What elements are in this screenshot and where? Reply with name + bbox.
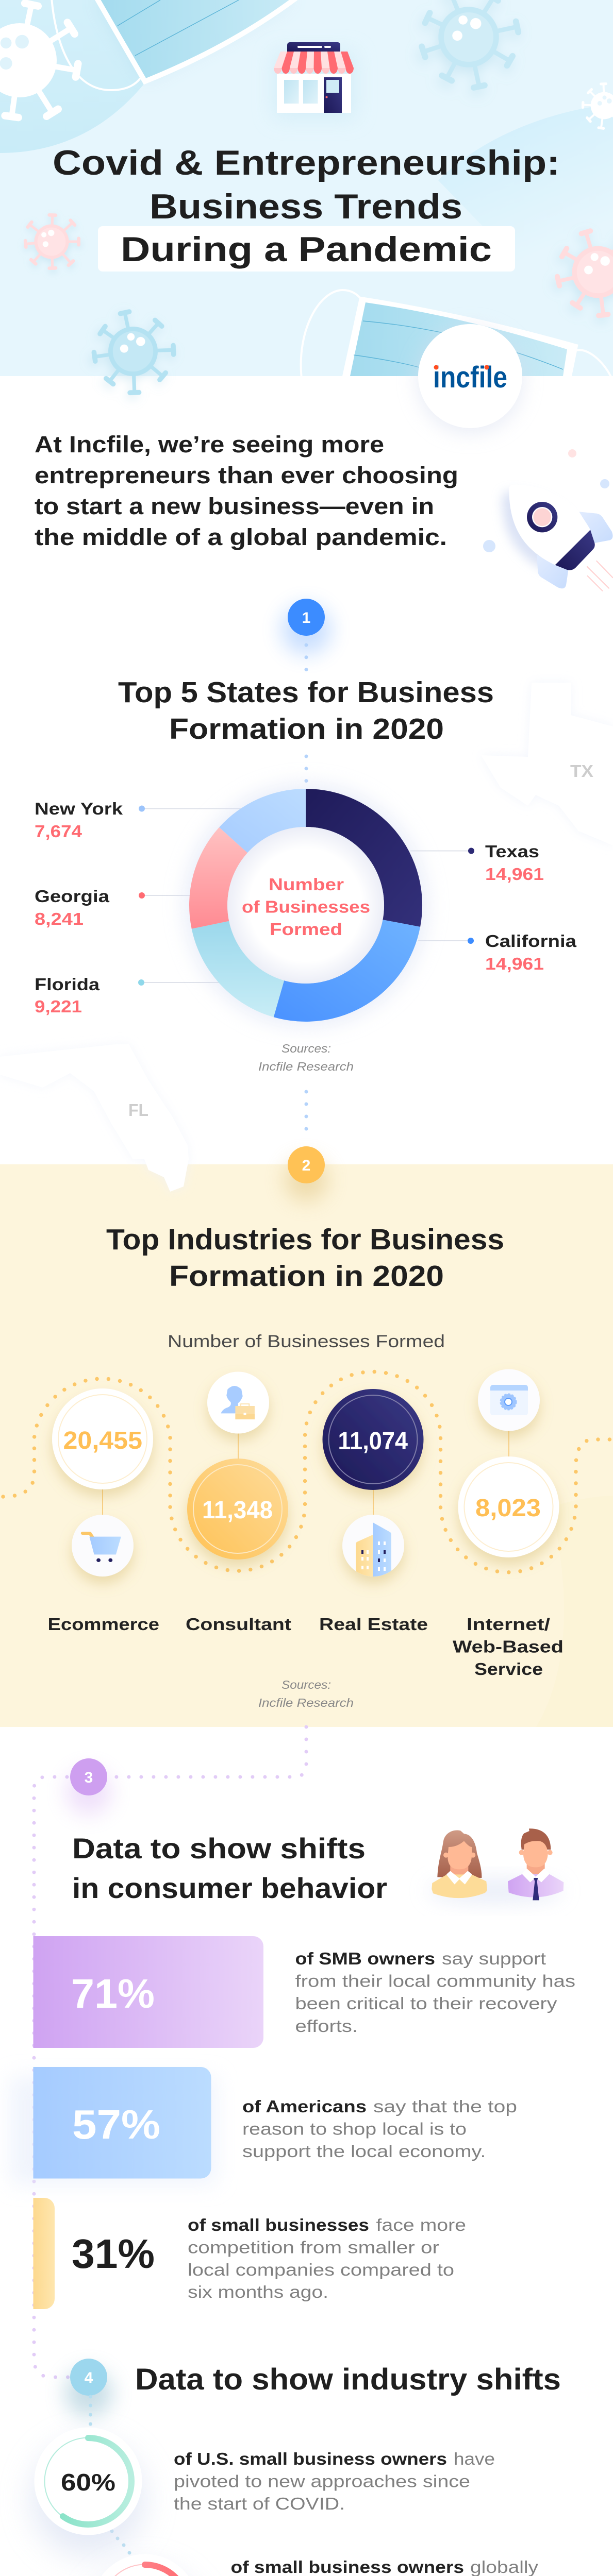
text: small businesses: six months ago. [188,2282,328,2301]
legend: New York: New York [35,799,123,818]
text: Americans: of Americans [242,2097,367,2116]
text: small businesses: face more [376,2215,466,2234]
legend: Georgia: 8,241 [35,909,84,928]
legend: Georgia: Georgia [35,887,110,906]
industry labels: Real Estate [319,1615,428,1634]
title highlight box [98,226,515,272]
sources [258,1678,354,1709]
text: SMB owners [295,1949,575,2036]
legend: California [468,931,577,973]
step badge 3: 3 [85,1769,93,1786]
text: small businesses: of small businesses [188,2215,369,2234]
dotted connector [304,1092,308,1129]
sources: Incfile Research [258,1696,354,1709]
logo badge: incfile circle [418,324,522,432]
text: small businesses: local companies compared to [188,2260,454,2279]
donut centre label [242,875,370,939]
industry labels: Ecommerce [47,1615,159,1634]
bubble: Real Estate 11,074: 11,074 [338,1428,408,1455]
leader lines [141,809,471,982]
icon: shopping cart [72,1515,134,1577]
icon: blue virus lower [81,300,186,404]
step badge 3 [66,1758,111,1815]
legend: California: 14,961 [485,954,544,973]
title text: During a Pandemic [121,230,492,269]
step badge 4: 4 [85,2369,93,2386]
text: U.S. owners pivoted: the start of COVID. [174,2494,345,2513]
map: Florida outline: FL [128,1100,148,1120]
heading: top 5 states [118,676,494,745]
icon: web settings window [478,1369,540,1431]
panel: section 4 industry shifts [31,2359,561,2576]
connector stems [103,1430,509,1517]
heading: consumer behavior: Data to show shifts [72,1832,366,1865]
icon: consultant [207,1371,269,1433]
legend: Florida: 9,221 [35,997,82,1016]
heading: top 5 states: Formation in 2020 [169,713,444,745]
text: U.S. owners pivoted: pivoted to new approaches since [174,2472,470,2490]
donut centre label: of Businesses [242,897,370,916]
heading: top industries [106,1223,504,1293]
icon: face mask bottom [301,290,612,379]
bubble: Ecommerce 20,455: 20,455 [63,1427,142,1454]
hero background [0,0,613,376]
industry labels: Consultant [186,1615,291,1634]
logo badge: incfile circle: incfile [433,361,507,394]
sources [258,1042,354,1073]
text: SMB owners: say support [442,1949,546,1968]
text: SMB owners: of SMB owners [295,1949,435,1968]
industry labels: Service [474,1659,543,1679]
donut centre label: Formed [270,920,342,939]
ring: 60% [31,2428,145,2555]
text: SMB owners: from their local community has [295,1971,575,1991]
dotted path [34,1727,306,2377]
text: owners experimented [231,2557,539,2576]
icon: small white virus right [575,76,613,135]
sources: Sources: [281,1678,331,1691]
woman [432,1830,487,1898]
heading: consumer behavior: in consumer behavior [72,1872,387,1904]
legend: Texas: 14,961 [485,865,544,884]
dotted wave [3,1372,613,1572]
intro paragraph [35,431,458,550]
bubble: Ecommerce 20,455 [52,1388,153,1489]
step badge 4 [65,2359,112,2417]
bar: 71%: 71% [71,1971,155,2016]
step badge 2: 2 [302,1157,310,1174]
map: Texas outline: TX [570,761,593,781]
icon: blue virus top right [410,0,529,97]
text: U.S. owners pivoted: of U.S. small business owners [174,2449,447,2468]
text: Americans: reason to shop local is to [242,2120,467,2138]
text: U.S. owners pivoted: have [454,2449,495,2468]
sources: Incfile Research [258,1060,354,1073]
panel: hero header [0,0,613,404]
legend: Florida: Florida [35,975,100,994]
bar: 57%: 57% [72,2102,160,2147]
bubble: Consultant 11,348 [187,1459,288,1560]
legend: California: California [485,931,577,951]
bubble: Internet 8,023 [458,1456,559,1557]
legend: New York: 7,674 [35,822,82,841]
panel: section 1 top states [35,599,613,1129]
bar: 31% [33,2198,155,2309]
icon: face mask top [52,0,299,90]
industry labels: Internet/ [467,1615,550,1634]
icon: pink virus left [21,211,83,273]
legend: Florida [35,975,144,1016]
icon: shop storefront [273,42,356,118]
bubble: Real Estate 11,074 [323,1389,424,1490]
text: small businesses: competition from smaller or [188,2238,439,2257]
legend: Texas: Texas [485,842,539,861]
title text: Business Trends [150,187,462,226]
chart subtitle: Number of Businesses Formed [168,1332,445,1351]
section background [0,1164,613,1727]
intro paragraph: At Incfile, we’re seeing more [35,431,384,457]
dotted connectors [89,2395,131,2576]
intro paragraph: entrepreneurs than ever choosing [35,462,458,488]
text: Americans: say that the top [373,2097,517,2116]
heading: industry shifts: Data to show industry shifts [135,2363,561,2396]
donut chart [185,784,427,1026]
text: SMB owners: been critical to their recovery [295,1994,557,2013]
industry labels: Web-Based [453,1637,564,1656]
text: Americans: support the local economy. [242,2142,486,2161]
step badge 1 [281,599,331,654]
bar: 31%: 31% [72,2231,155,2277]
legend: Texas [468,842,544,884]
icon: buildings [342,1515,404,1579]
title text [53,143,560,269]
title text: Covid & Entrepreneurship: [53,143,560,182]
dotted connector [304,645,308,781]
bar: 57% [10,2067,217,2184]
ring: 60%: 60% [61,2469,115,2496]
icon: white virus top left [0,3,78,117]
text: owners experimented: globally [470,2557,539,2576]
icon: rocket [483,449,613,591]
map: Texas outline [481,683,613,845]
intro paragraph: the middle of a global pandemic. [35,524,447,550]
bar: 71% [33,1936,263,2048]
donut centre label: Number [269,875,344,894]
industry labels [47,1615,564,1679]
intro paragraph: to start a new business—even in [35,493,434,519]
step badge 1: 1 [302,609,310,626]
background shape [536,1496,613,1727]
heading: top industries: Formation in 2020 [169,1260,444,1293]
ring: 67% [88,2554,202,2576]
heading: top 5 states: Top 5 States for Business [118,676,494,709]
text: U.S. owners pivoted [174,2449,495,2513]
map: Florida outline [0,1044,189,1192]
panel: section 2 top industries [0,1044,613,1727]
legend: New York [35,799,145,841]
text: SMB owners: efforts. [295,2016,358,2036]
legend: Georgia [35,887,145,928]
heading: consumer behavior [72,1832,387,1904]
sources: Sources: [281,1042,331,1055]
heading: top industries: Top Industries for Business [106,1223,504,1256]
text: small businesses [188,2215,466,2301]
bubble: Consultant 11,348: 11,348 [202,1497,273,1524]
bubble: Internet 8,023: 8,023 [475,1495,541,1522]
step badge 2 [285,1146,328,1201]
title [53,143,560,272]
panel: section 3 consumer behavior [10,1727,575,2377]
man [508,1828,564,1900]
icon: two people [428,1828,564,1902]
background blobs [0,0,613,361]
text: owners experimented: of small business owners [231,2557,464,2576]
icon: pink virus right [545,219,613,326]
text: Americans [242,2097,517,2161]
